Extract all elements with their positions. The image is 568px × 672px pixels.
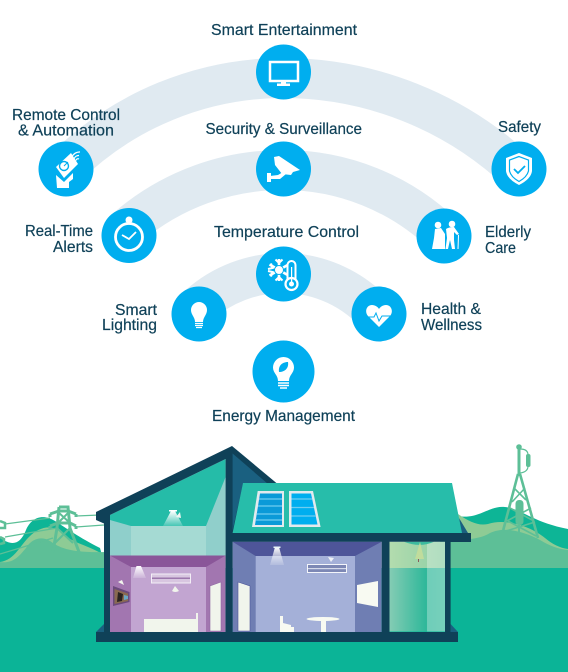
house: bedroom xyxy=(110,556,226,632)
label: Temperature Control: Temperature Control xyxy=(214,224,359,241)
label: Health & Wellness xyxy=(421,301,482,334)
label: Smart Lighting xyxy=(102,302,158,334)
house: solar panel right xyxy=(289,491,321,527)
ground xyxy=(0,568,568,672)
icon: light bulb xyxy=(172,286,226,342)
icon: health heart xyxy=(352,286,406,342)
label: Security & Surveillance: Security & Surveillance xyxy=(206,121,362,138)
label: Smart Entertainment: Smart Entertainment xyxy=(211,22,358,39)
icon: safety shield xyxy=(492,142,546,196)
label: Remote Control & Automation xyxy=(12,107,120,140)
label: Safety: Safety xyxy=(498,119,541,136)
house: glass sunroom xyxy=(390,542,445,632)
house: green roof xyxy=(233,483,462,533)
icon: remote control xyxy=(38,142,94,196)
label: Real-Time Alerts xyxy=(25,223,93,256)
label: Health & Wellness: Wellness xyxy=(421,317,482,334)
house: base xyxy=(96,632,458,642)
landscape: left hills xyxy=(0,517,106,570)
icon: security camera xyxy=(256,142,311,196)
icon: smart entertainment monitor xyxy=(256,44,311,100)
icon: temperature snowflake and thermometer xyxy=(256,246,311,302)
wifi arcs xyxy=(66,78,519,318)
landscape: right hills xyxy=(440,507,568,570)
label: Elderly Care: Elderly xyxy=(485,224,531,241)
label: Remote Control & Automation: Remote Control xyxy=(12,107,120,124)
label: Elderly Care xyxy=(485,224,531,257)
label: Health & Wellness: Health & xyxy=(421,301,481,318)
house: rear roof slope xyxy=(232,446,280,541)
label: Elderly Care: Care xyxy=(485,240,516,257)
power lines and pylon: left xyxy=(0,507,104,554)
house: solar panel left xyxy=(252,491,284,527)
house: structural frame xyxy=(96,446,471,632)
label: Real-Time Alerts: Real-Time xyxy=(25,223,93,240)
label: Energy Management: Energy Management xyxy=(212,408,356,425)
label: Real-Time Alerts: Alerts xyxy=(53,239,93,256)
label: Smart Lighting: Lighting xyxy=(102,317,157,334)
house: roof triangle right xyxy=(459,518,468,533)
bedroom TV xyxy=(113,586,130,606)
house xyxy=(96,446,471,642)
label: Remote Control & Automation: & Automation xyxy=(18,122,114,140)
house: attic room xyxy=(110,459,226,556)
icon: elderly couple xyxy=(416,208,472,264)
house: living room xyxy=(233,542,382,632)
icon: alerts stopwatch xyxy=(102,208,156,263)
tower: right xyxy=(503,444,538,538)
icon: energy bulb with leaf xyxy=(252,340,314,402)
label: Smart Lighting: Smart xyxy=(115,302,158,319)
